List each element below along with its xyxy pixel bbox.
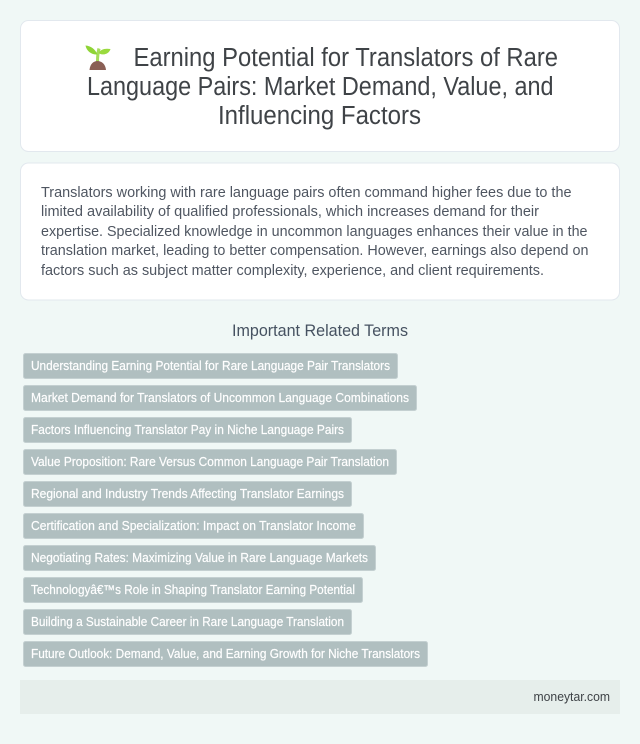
tag 8 [24,578,362,602]
list: related term tags [24,354,428,666]
tag 4: Value Proposition: Rare Versus Common Language Pair Translation [31,455,389,469]
footer bar [20,680,620,714]
tag 9 [24,610,352,634]
description text: Translators working with rare language pairs often command higher fees due to the [41,184,572,201]
description text: expertise. Specialized knowledge in uncommon languages enhances their value in the [41,223,588,240]
tag 5 [24,482,352,506]
tag 7 [24,546,376,570]
title text [87,44,558,130]
title text: Earning Potential for Translators of Rare [134,44,558,72]
tag 3 [24,418,352,442]
title text: Influencing Factors [218,102,421,130]
tag 7: Negotiating Rates: Maximizing Value in Rare Language Markets [31,551,368,565]
tag 6 [24,514,364,538]
description text: translation market, leading to better compensation. However, earnings also depend on [41,242,588,259]
panel: title card [20,20,620,152]
tag 2: Market Demand for Translators of Uncommon Language Combinations [31,391,409,405]
tag 9: Building a Sustainable Career in Rare Language Translation [31,615,344,629]
tag 1 [24,354,398,378]
description text: limited availability of qualified professionals, which increases demand for their [41,203,539,220]
tag 8: Technologyâ€™s Role in Shaping Translator Earning Potential [31,583,355,597]
tag 6: Certification and Specialization: Impact on Translator Income [31,519,356,533]
heading: important related terms: Important Related Terms [232,322,408,340]
tag 10: Future Outlook: Demand, Value, and Earning Growth for Niche Translators [31,647,420,661]
tag 2 [24,386,416,410]
panel: description card [20,163,620,300]
icon: sprout [86,46,110,70]
tag 3: Factors Influencing Translator Pay in Niche Language Pairs [31,423,344,437]
footer source text: moneytar.com [534,690,610,704]
description text [41,184,588,279]
title text: Language Pairs: Market Demand, Value, and [87,73,554,101]
description text: factors such as subject matter complexity, experience, and client requirements. [41,262,544,279]
tag 4 [24,450,396,474]
tag 1: Understanding Earning Potential for Rare Language Pair Translators [31,359,390,373]
tag 10 [24,642,428,666]
tag 5: Regional and Industry Trends Affecting Translator Earnings [31,487,344,501]
